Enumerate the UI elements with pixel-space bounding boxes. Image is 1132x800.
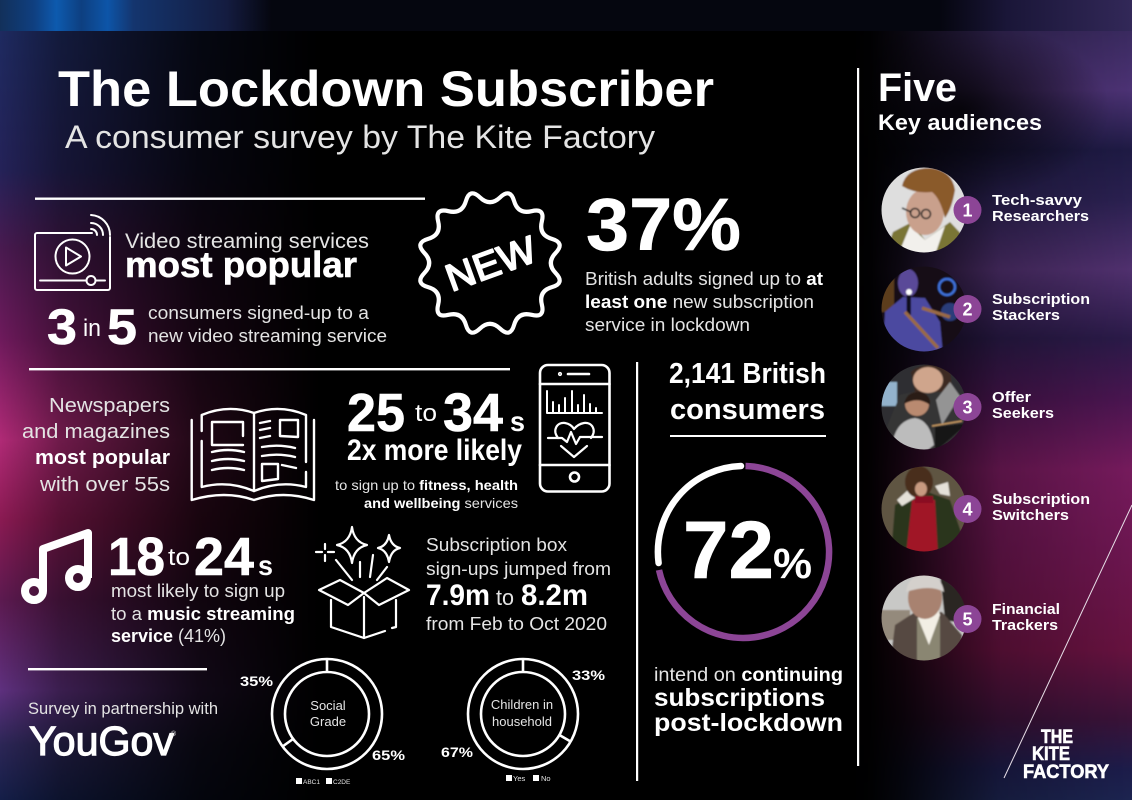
legend: social grade: ABC1 <box>303 779 320 786</box>
badge: 4: 4 <box>962 500 973 520</box>
text: continuing subscriptions: intend on continuing <box>654 665 843 686</box>
logo: the kite factory: KITE <box>1032 744 1070 765</box>
heading: video streaming: Video streaming services <box>125 230 369 253</box>
text: newspapers and magazines <box>22 394 170 496</box>
logo: YouGov: ® <box>171 730 177 738</box>
number: 18 to 24s: 18 <box>108 527 165 587</box>
icon: video streaming screen <box>35 215 110 290</box>
number: 18 to 24s: 24 <box>194 527 254 587</box>
stat: 3 in 5: 5 <box>107 299 137 355</box>
text: british adults: service in lockdown <box>585 315 750 335</box>
icon: new badge <box>420 193 560 333</box>
number: 72%: 72 <box>683 505 774 596</box>
chart: children in household ring <box>441 659 606 783</box>
panel: audience 3 <box>880 362 1054 452</box>
panel: audience 2 <box>880 265 1090 355</box>
chart: children in household ring: 67% <box>441 744 474 760</box>
text: fitness services <box>335 477 518 511</box>
badge: 5: 5 <box>962 610 973 630</box>
panel: audience 4 <box>880 465 1090 555</box>
stat: 3 in 5 <box>47 299 137 355</box>
chart: children in household ring: 33% <box>572 667 606 683</box>
text: newspapers and magazines: and magazines <box>22 420 170 443</box>
text: newspapers and magazines: most popular <box>35 446 170 469</box>
text: music streaming: service (41%) <box>111 626 226 646</box>
panel: audience 1 <box>880 165 1089 255</box>
text: british adults <box>585 269 823 335</box>
chart: social grade ring: Social <box>310 698 346 713</box>
logo: the kite factory: FACTORY <box>1023 762 1109 783</box>
chart: social grade ring: Grade <box>310 714 346 729</box>
heading: five key audiences: Key audiences <box>878 110 1042 135</box>
chart: social grade ring <box>240 659 406 786</box>
number: 25 to 34s: 25 <box>347 383 405 443</box>
legend: children <box>506 774 551 783</box>
panel: 18 to 24s <box>25 527 295 646</box>
badge: 5 <box>954 605 982 633</box>
label: subscription stackers: Stackers <box>992 308 1060 324</box>
number: 37%: 37% <box>586 183 741 266</box>
icon: music note <box>25 533 88 600</box>
chart: social grade ring: 35% <box>240 673 274 689</box>
text: subscription box: to <box>496 585 514 610</box>
number: 25 to 34s <box>347 383 525 443</box>
heading: five key audiences <box>878 66 1042 135</box>
legend: children: No <box>541 774 551 783</box>
badge: 2 <box>954 295 982 323</box>
text: subscription box: from Feb to Oct 2020 <box>426 613 607 634</box>
text: continuing subscriptions: subscriptions <box>654 684 825 712</box>
number: 25 to 34s: 34 <box>443 383 503 443</box>
text: fitness services: and wellbeing services <box>364 495 518 511</box>
heading: 2x more likely: 2x more likely <box>347 434 522 467</box>
icon: open book <box>192 409 314 500</box>
text: subscription box: Subscription box <box>426 534 568 555</box>
text: subscription box: sign-ups jumped from <box>426 558 611 579</box>
panel: 37 percent stat <box>585 183 823 335</box>
photo: woman with glasses <box>882 168 964 252</box>
number: 18 to 24s: s <box>258 550 273 581</box>
photo: person with microphone <box>882 266 964 352</box>
text: subscription box <box>426 534 611 634</box>
photo: older man <box>882 576 964 660</box>
logo: the kite factory <box>1004 505 1132 783</box>
title: The Lockdown Subscriber <box>58 61 714 117</box>
number: 25 to 34s: s <box>510 406 525 437</box>
text: newspapers and magazines: Newspapers <box>49 394 170 417</box>
chart: 72 percent ring <box>658 466 829 638</box>
panel: 72 percent <box>654 358 843 737</box>
photo: mother and baby <box>882 364 964 450</box>
panel: audience 5 <box>880 574 1060 664</box>
number: 18 to 24s: to <box>168 544 190 571</box>
panel: newspapers <box>22 394 314 500</box>
panel: 25 to 34s <box>335 365 610 511</box>
badge: 2: 2 <box>962 300 973 320</box>
label: offer seekers: Seekers <box>992 406 1054 422</box>
panel: survey partner <box>28 699 218 764</box>
text: subscription box: 7.9m <box>426 579 490 612</box>
label: tech-savvy researchers: Researchers <box>992 209 1089 225</box>
text: music streaming: to a music streaming <box>111 604 295 624</box>
heading: british consumers: 2,141 British <box>669 358 826 390</box>
label: subscription stackers <box>992 292 1090 324</box>
panel: subscription box <box>316 527 611 638</box>
icon: gift box <box>316 527 409 638</box>
heading: british consumers <box>669 358 826 426</box>
heading: british consumers: consumers <box>670 394 825 426</box>
label: offer seekers: Offer <box>992 390 1031 406</box>
text: music streaming <box>111 581 295 646</box>
subtitle: A consumer survey by The Kite Factory <box>65 119 655 155</box>
badge: 3 <box>954 393 982 421</box>
label: financial trackers <box>992 602 1060 634</box>
heading: most popular: most popular <box>125 244 357 285</box>
text: consumers signed up: consumers signed-up to a <box>148 303 370 323</box>
chart: children in household ring: household <box>492 714 552 729</box>
logo: YouGov: YouGov <box>29 718 174 764</box>
text: newspapers and magazines: with over 55s <box>39 473 170 496</box>
legend: children: Yes <box>513 774 525 783</box>
text: british adults: British adults signed up to at <box>585 269 823 289</box>
legend: social grade <box>296 778 351 786</box>
label: subscription stackers: Subscription <box>992 292 1090 308</box>
label: subscription switchers: Switchers <box>992 508 1069 524</box>
chart: social grade ring: 65% <box>372 747 406 763</box>
badge: 3: 3 <box>962 398 973 418</box>
text: consumers signed up <box>148 303 387 346</box>
stat: 3 in 5: in <box>83 315 101 342</box>
photo: woman in red jumper <box>882 466 964 552</box>
title <box>58 61 714 155</box>
label: financial trackers: Financial <box>992 602 1060 618</box>
text: music streaming: most likely to sign up <box>111 581 285 601</box>
label: financial trackers: Trackers <box>992 618 1058 634</box>
text: subscription box: 8.2m <box>521 579 588 612</box>
label: tech-savvy researchers: Tech-savvy <box>992 193 1082 209</box>
badge: 4 <box>954 495 982 523</box>
icon: new badge: NEW <box>440 229 542 300</box>
text: british adults: least one new subscription <box>585 292 814 312</box>
stat: 3 in 5: 3 <box>47 299 77 355</box>
number: 72%: % <box>773 540 812 588</box>
number: 25 to 34s: to <box>415 400 437 427</box>
badge: 1: 1 <box>962 200 973 220</box>
heading: five key audiences: Five <box>878 66 957 110</box>
text: continuing subscriptions: post-lockdown <box>654 709 843 737</box>
label: subscription switchers <box>992 492 1090 524</box>
logo: the kite factory: THE <box>1041 727 1073 748</box>
text: continuing subscriptions <box>654 665 843 737</box>
text: consumers signed up: new video streaming service <box>148 326 387 346</box>
chart: children in household ring: Children in <box>491 697 553 712</box>
text: fitness services: to sign up to fitness, health <box>335 477 518 493</box>
panel: video streaming <box>35 215 387 355</box>
label: subscription switchers: Subscription <box>992 492 1090 508</box>
section dividers <box>28 68 859 781</box>
icon: phone with heart rate <box>540 365 610 492</box>
text: survey in partnership: Survey in partnership with <box>28 699 218 718</box>
label: tech-savvy researchers <box>992 193 1089 225</box>
badge: 1 <box>954 196 982 224</box>
legend: social grade: C2DE <box>333 779 351 786</box>
label: offer seekers <box>992 390 1054 422</box>
number: 18 to 24s <box>108 527 273 587</box>
